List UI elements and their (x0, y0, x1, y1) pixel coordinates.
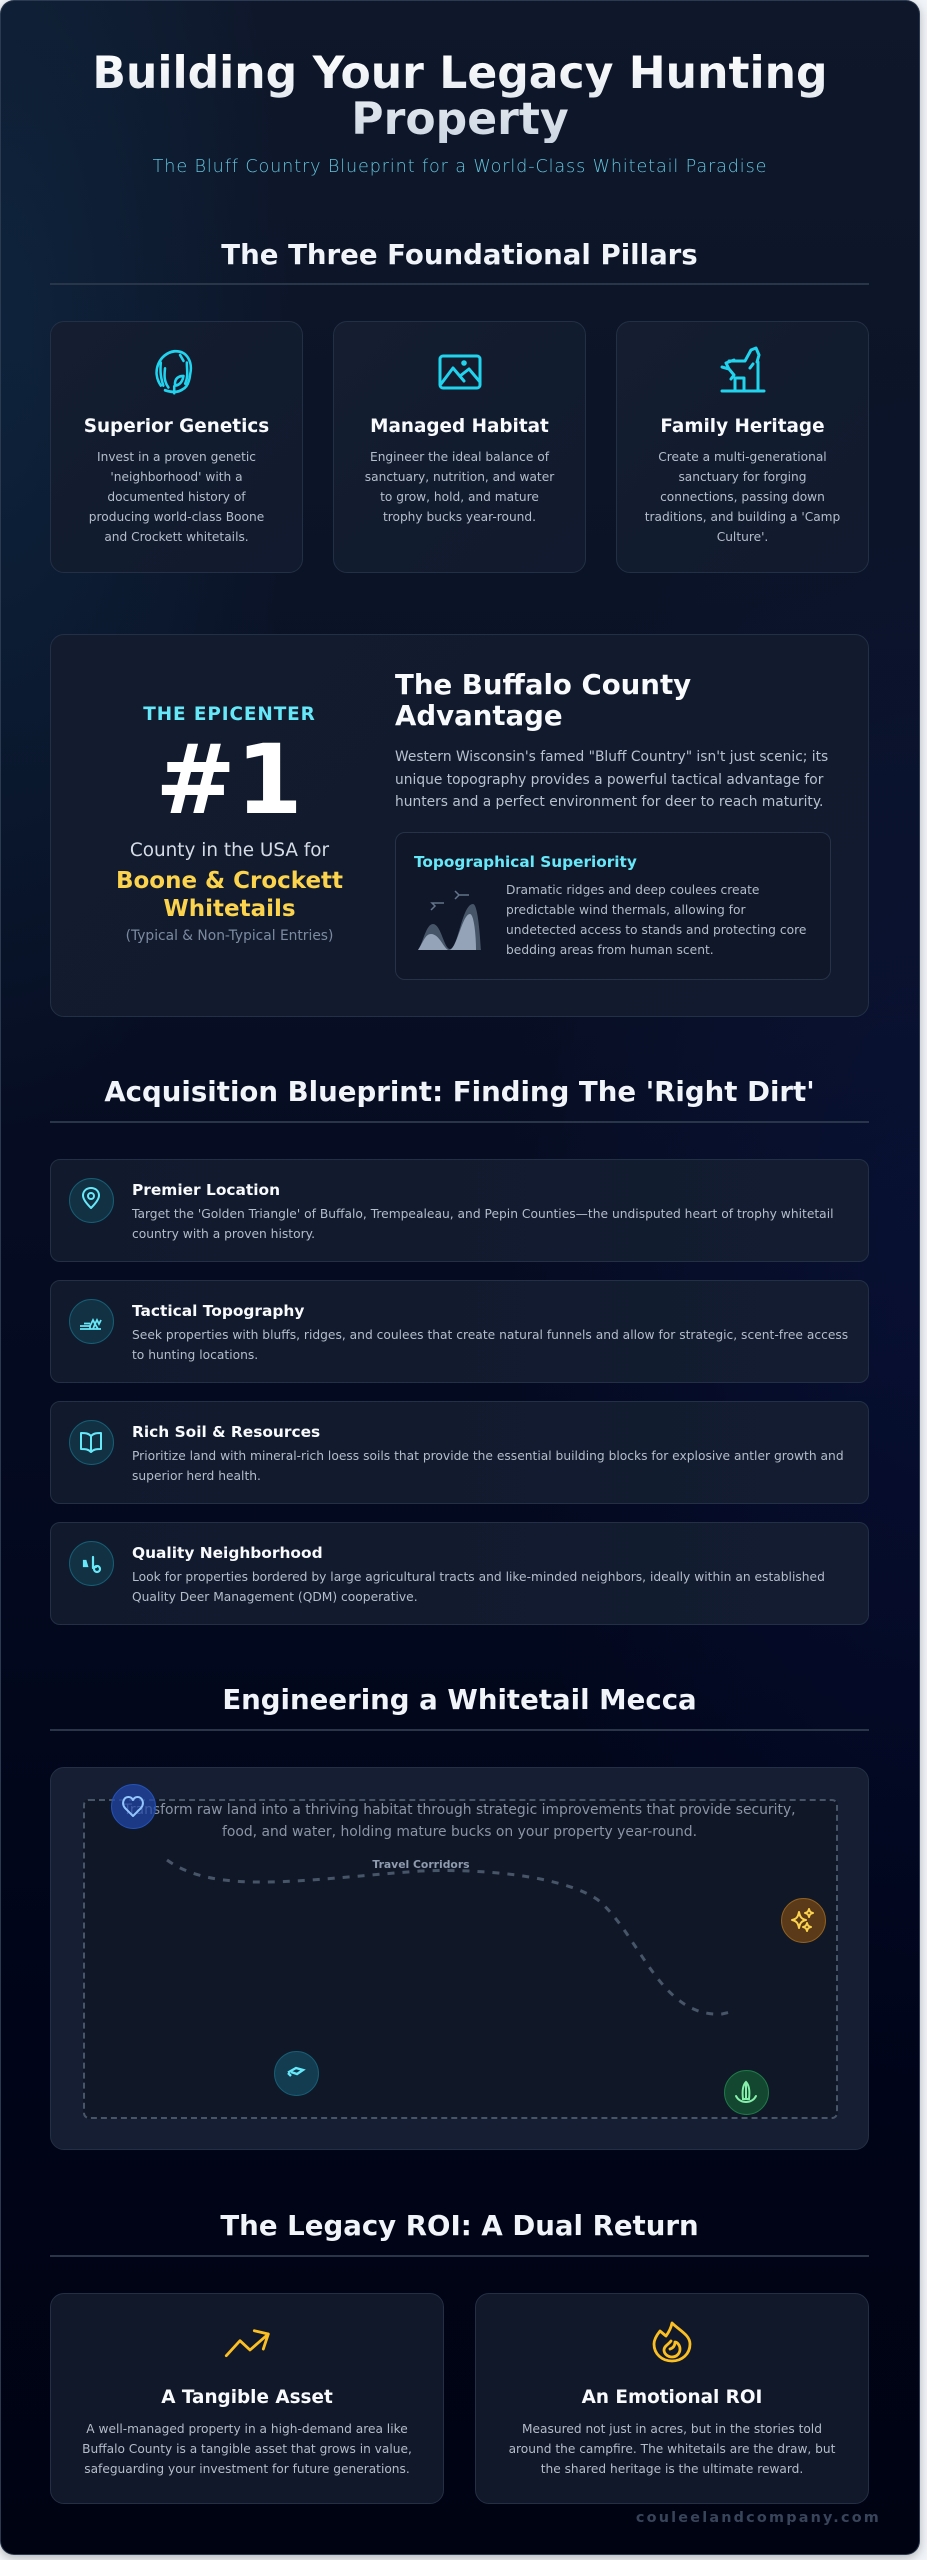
icon: genetics (155, 350, 192, 394)
panel: tangible asset: safeguarding your investment for future generations. (84, 2462, 410, 2476)
icon: homestead (720, 346, 766, 392)
item text: Target the 'Golden Triangle' of Buffalo, Trempealeau, and Pepin Counties—the undisputed heart of trophy whitetail (132, 1207, 834, 1221)
map intro text: food, and water, holding mature bucks on your property year-round. (222, 1824, 697, 1840)
advantage text: Western Wisconsin's famed "Bluff Country" isn't just scenic; its (395, 749, 828, 765)
card text: Engineer the ideal balance of (370, 450, 549, 464)
subtitle: The Bluff Country Blueprint for a World-Class Whitetail Paradise (153, 157, 767, 177)
advantage heading: Advantage (395, 698, 563, 732)
item text (132, 1570, 825, 1604)
marker: heart sanctuary (111, 1784, 156, 1829)
stat footnote: (Typical & Non-Typical Entries) (126, 928, 333, 944)
panel: quality neighborhood (50, 1522, 869, 1625)
card text (509, 2422, 836, 2476)
icon: neighbors (69, 1541, 114, 1586)
panel: managed habitat (333, 321, 586, 573)
eyebrow: the epicenter: THE EPICENTER (143, 704, 316, 725)
icon: bluff ridges and wind (418, 890, 481, 950)
advantage text: unique topography provides a powerful tactical advantage for (395, 772, 823, 788)
marker: water (274, 2051, 319, 2096)
panel: managed habitat: to grow, hold, and mature (380, 490, 539, 504)
icon: trending up (224, 2329, 270, 2358)
panel: habitat map (50, 1767, 869, 2150)
item text (132, 1449, 844, 1483)
map area (83, 1799, 838, 2119)
panel: tangible asset (50, 2293, 444, 2504)
card text (365, 450, 554, 524)
map intro text (123, 1802, 796, 1840)
item text: superior herd health. (132, 1469, 261, 1483)
panel: superior genetics: and Crockett whitetails. (104, 530, 249, 544)
watermark: couleelandcompany.com (636, 2510, 881, 2526)
card text: Measured not just in acres, but in the stories told (522, 2422, 822, 2436)
heading text: The Three Foundational Pillars (221, 238, 698, 271)
card text (645, 450, 840, 544)
title (0, 51, 920, 143)
card text: Invest in a proven genetic (97, 450, 256, 464)
item text: to hunting locations. (132, 1348, 258, 1362)
panel: superior genetics: producing world-class Boone (89, 510, 264, 524)
panel: tangible asset: Buffalo County is a tangible asset that grows in value, (82, 2442, 412, 2456)
corridor label: Travel Corridors (372, 1858, 470, 1871)
heading text: The Legacy ROI: A Dual Return (220, 2209, 699, 2242)
stat highlight: Whitetails (163, 896, 296, 922)
advantage text (395, 749, 828, 810)
sub text: undetected access to stands and protecting core (506, 923, 806, 937)
sub text: predictable wind thermals, allowing for (506, 903, 746, 917)
panel: family heritage: sanctuary for forging (678, 470, 807, 484)
card title: An Emotional ROI (582, 2387, 762, 2408)
panel: managed habitat: sanctuary, nutrition, and water (365, 470, 554, 484)
item title: Premier Location (132, 1181, 280, 1199)
advantage heading: The Buffalo County (395, 668, 691, 701)
sub text: bedding areas from human scent. (506, 943, 714, 957)
item title: Tactical Topography (132, 1302, 304, 1320)
stat: number one: #1 (155, 724, 303, 836)
icon: flame (652, 2322, 692, 2362)
panel: family heritage: traditions, and building a 'Camp (645, 510, 840, 524)
panel: managed habitat: trophy bucks year-round. (383, 510, 536, 524)
panel: family heritage: connections, passing down (660, 490, 825, 504)
heading text: Engineering a Whitetail Mecca (222, 1683, 697, 1716)
item text (132, 1328, 848, 1362)
item text: Look for properties bordered by large agricultural tracts and like-minded neighbors, ideally within an established (132, 1570, 825, 1584)
card title: A Tangible Asset (161, 2387, 333, 2408)
panel: tactical topography (50, 1280, 869, 1383)
panel: superior genetics: 'neighborhood' with a (110, 470, 243, 484)
item text: Quality Deer Management (QDM) cooperative. (132, 1590, 418, 1604)
panel: superior genetics (50, 321, 303, 573)
marker: plant (724, 2070, 769, 2115)
stat highlight (116, 868, 343, 922)
sub text: Dramatic ridges and deep coulees create (506, 883, 759, 897)
card text: Create a multi-generational (658, 450, 827, 464)
title: Property (351, 94, 569, 145)
panel: buffalo county advantage (50, 634, 869, 1017)
marker: sparkle food plots (781, 1898, 826, 1943)
item title: Rich Soil & Resources (132, 1423, 320, 1441)
card title: Superior Genetics (84, 416, 269, 437)
stat caption: County in the USA for (130, 840, 329, 861)
panel: family heritage: Culture'. (717, 530, 768, 544)
travel corridor path (166, 1858, 728, 2016)
card text: A well-managed property in a high-demand area like (86, 2422, 408, 2436)
item text: Seek properties with bluffs, ridges, and coulees that create natural funnels and allow for strategic, scent-free access (132, 1328, 848, 1342)
card title: Managed Habitat (370, 416, 549, 437)
advantage text: hunters and a perfect environment for deer to reach maturity. (395, 794, 823, 810)
sub text (506, 883, 806, 957)
icon: terrain (69, 1299, 114, 1344)
map intro text: Transform raw land into a thriving habitat through strategic improvements that provide security, (123, 1802, 796, 1818)
icon: open book (69, 1420, 114, 1465)
item text: Prioritize land with mineral-rich loess soils that provide the essential building blocks for explosive antler growth and (132, 1449, 844, 1463)
item text (132, 1207, 834, 1241)
card text (82, 2422, 412, 2476)
icon: landscape picture (438, 354, 482, 390)
advantage heading (395, 668, 691, 732)
panel: topographical superiority (395, 832, 831, 980)
card text (89, 450, 264, 544)
panel: family heritage (616, 321, 869, 573)
sub heading: Topographical Superiority (414, 853, 637, 871)
panel: emotional roi: the shared heritage is the ultimate reward. (541, 2462, 803, 2476)
panel: rich soil (50, 1401, 869, 1504)
stat highlight: Boone & Crockett (116, 868, 343, 894)
item text: country with a proven history. (132, 1227, 315, 1241)
panel: emotional roi: around the campfire. The whitetails are the draw, but (509, 2442, 835, 2456)
card title: Family Heritage (660, 416, 825, 437)
panel: emotional roi (475, 2293, 869, 2504)
icon: map pin (69, 1178, 114, 1223)
heading text: Acquisition Blueprint: Finding The 'Right Dirt' (104, 1075, 815, 1108)
title: Building Your Legacy Hunting (92, 48, 828, 99)
item title: Quality Neighborhood (132, 1544, 323, 1562)
panel: premier location (50, 1159, 869, 1262)
panel: superior genetics: documented history of (107, 490, 246, 504)
